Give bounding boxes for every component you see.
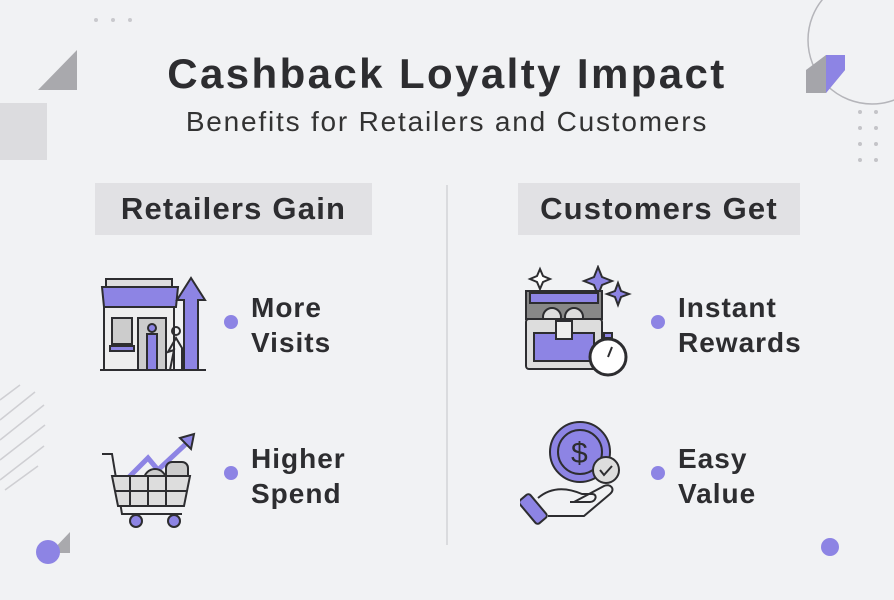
- text: more visits: More: [251, 292, 322, 323]
- bullet: easy value: [651, 466, 665, 480]
- text: higher spend: Spend: [251, 478, 342, 509]
- title: Cashback Loyalty Impact: [167, 50, 727, 97]
- icon: hand with coin: $: [571, 437, 588, 470]
- text: instant rewards: Rewards: [678, 327, 802, 358]
- icon: treasure chest with stopwatch: [525, 265, 632, 376]
- text: higher spend: Higher: [251, 443, 346, 474]
- heading: retailers gain: Retailers Gain: [121, 191, 346, 226]
- icon: shopping cart: $: [150, 473, 158, 488]
- text: instant rewards: [678, 292, 802, 358]
- icon: storefront: [100, 276, 207, 371]
- subtitle: Benefits for Retailers and Customers: [186, 106, 708, 137]
- heading: customers get: Customers Get: [540, 191, 778, 226]
- text: higher spend: [251, 443, 346, 509]
- bullet: more visits: [224, 315, 238, 329]
- text: instant rewards: Instant: [678, 292, 777, 323]
- icon: shopping cart: [102, 432, 196, 528]
- heading: customers get: [518, 183, 800, 235]
- heading: retailers gain: [95, 183, 372, 235]
- text: easy value: Value: [678, 478, 756, 509]
- icon: hand with coin: [520, 421, 620, 525]
- text: more visits: [251, 292, 331, 358]
- text: easy value: [678, 443, 756, 509]
- bullet: instant rewards: [651, 315, 665, 329]
- text: easy value: Easy: [678, 443, 747, 474]
- bullet: higher spend: [224, 466, 238, 480]
- text: more visits: Visits: [251, 327, 331, 358]
